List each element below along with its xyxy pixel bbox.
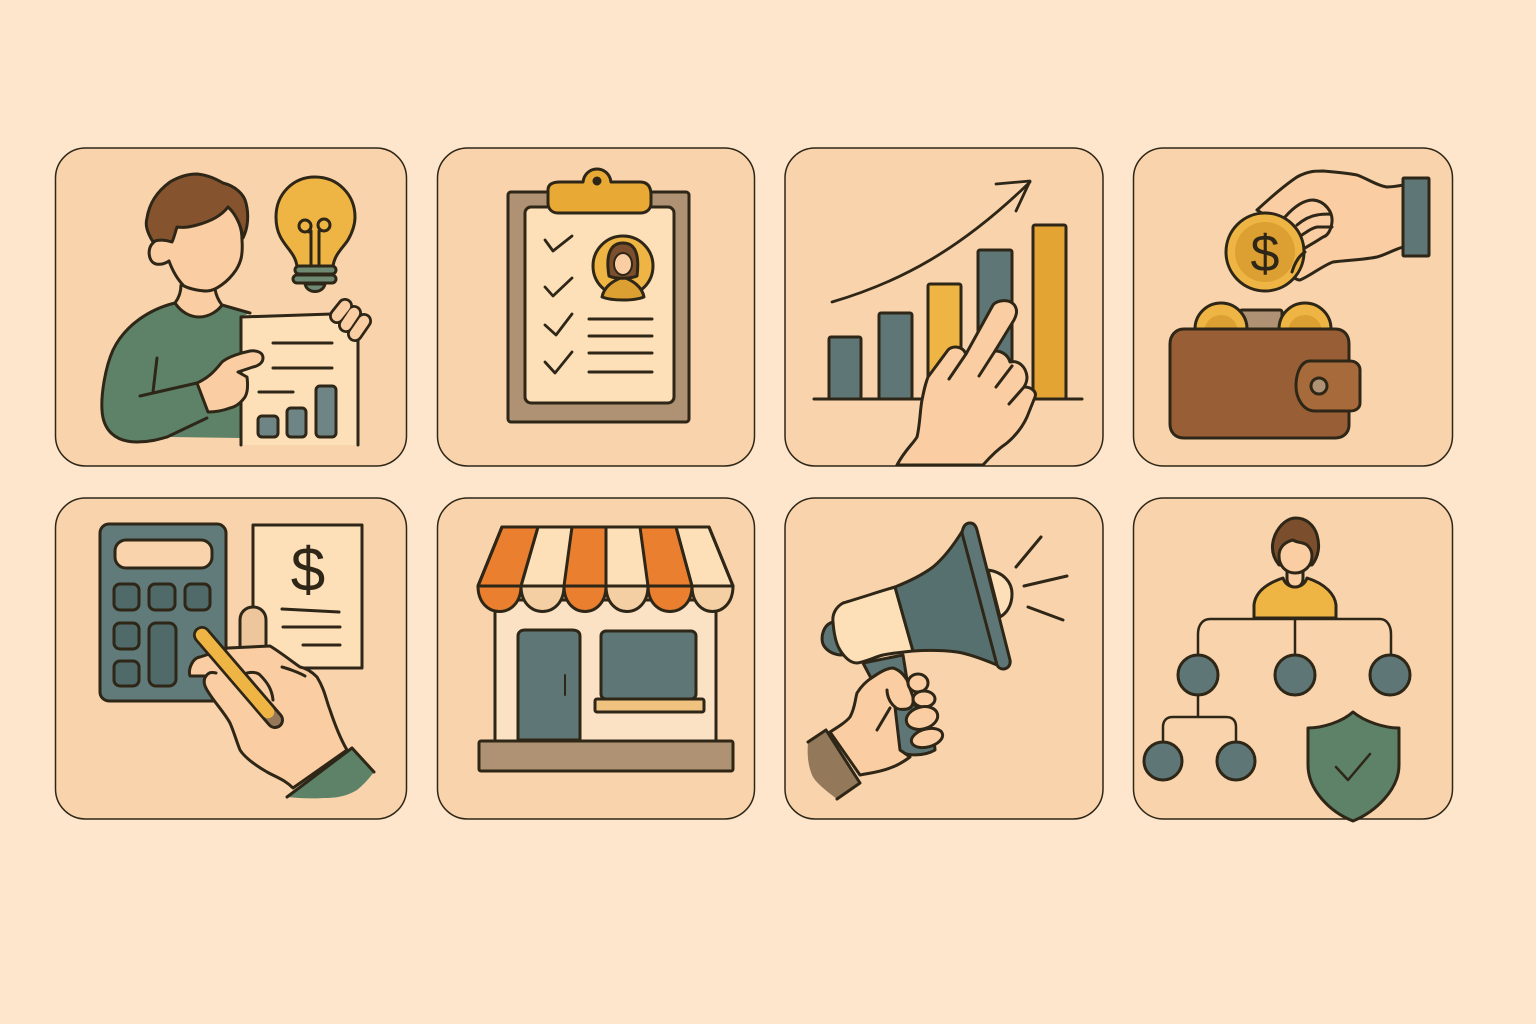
panel: growth chart with hand (785, 148, 1103, 466)
icon: cuff (1403, 178, 1429, 256)
icon: wallet (1170, 329, 1360, 438)
panel: storefront (438, 498, 754, 819)
icon: megaphone handle (863, 655, 935, 755)
icon: calculator (100, 524, 226, 701)
icon: awning (478, 527, 733, 612)
icon: report sheet with bars (241, 314, 358, 445)
icon: invoice sheet: $ (291, 536, 325, 605)
icon: shield (1308, 712, 1399, 821)
icon: fingers detail (206, 667, 305, 700)
icon: megaphone mouthpiece (833, 587, 913, 663)
icon: pointing hand (197, 351, 263, 412)
icon: profile avatar (593, 236, 653, 300)
icon: door (518, 630, 580, 740)
icon: person sweater (102, 303, 250, 442)
icon: person neck (175, 285, 222, 317)
icon: person face and ear (149, 205, 242, 291)
icon: paper (525, 207, 674, 403)
panel: megaphone (785, 498, 1103, 819)
chart: bars (814, 225, 1082, 399)
icon: pencil (202, 635, 275, 720)
icon: hair (146, 174, 248, 242)
icon: dollar coin: $ (1251, 225, 1280, 283)
arrow: growth trend (832, 181, 1030, 302)
icon: text lines (589, 319, 652, 372)
panel: org chart and shield (1134, 498, 1452, 821)
icon: clip (548, 169, 651, 213)
icon: megaphone cone (895, 530, 997, 665)
panel: calculator and invoice (56, 498, 406, 819)
icon: fingers (877, 674, 945, 751)
icon: fingers holding sheet (337, 306, 364, 334)
icon: dollar coin (1226, 213, 1304, 291)
icon: coins in wallet (1195, 303, 1331, 355)
icon: org nodes (1144, 655, 1410, 780)
icon: speaker cone glow (988, 570, 1012, 617)
icon: check marks (545, 236, 572, 373)
icon: clipboard board (508, 192, 689, 422)
panel: person with idea and report (56, 148, 406, 466)
icon: light bulb (276, 177, 355, 292)
panel: wallet and coin (1134, 148, 1452, 466)
icon: hand (830, 668, 913, 775)
icon: sleeve (808, 730, 860, 799)
panel: clipboard checklist (438, 148, 754, 466)
chart: org connections (1163, 618, 1391, 743)
icon: megaphone knob (822, 622, 842, 655)
icon: megaphone rim (962, 523, 1010, 669)
icon: shop wall (495, 600, 716, 741)
icon: fingers (1285, 200, 1332, 272)
icon: hand (1257, 171, 1403, 280)
icon: hand (189, 646, 347, 788)
icon: window (601, 631, 696, 699)
icon: invoice sheet (253, 525, 362, 668)
icon: pointing hand (897, 301, 1035, 465)
icon: top person (1254, 518, 1336, 618)
icon: shop base (479, 741, 733, 771)
icon: index finger (240, 607, 266, 650)
icon: sleeve (287, 748, 374, 798)
icon: sound lines (1016, 537, 1067, 620)
